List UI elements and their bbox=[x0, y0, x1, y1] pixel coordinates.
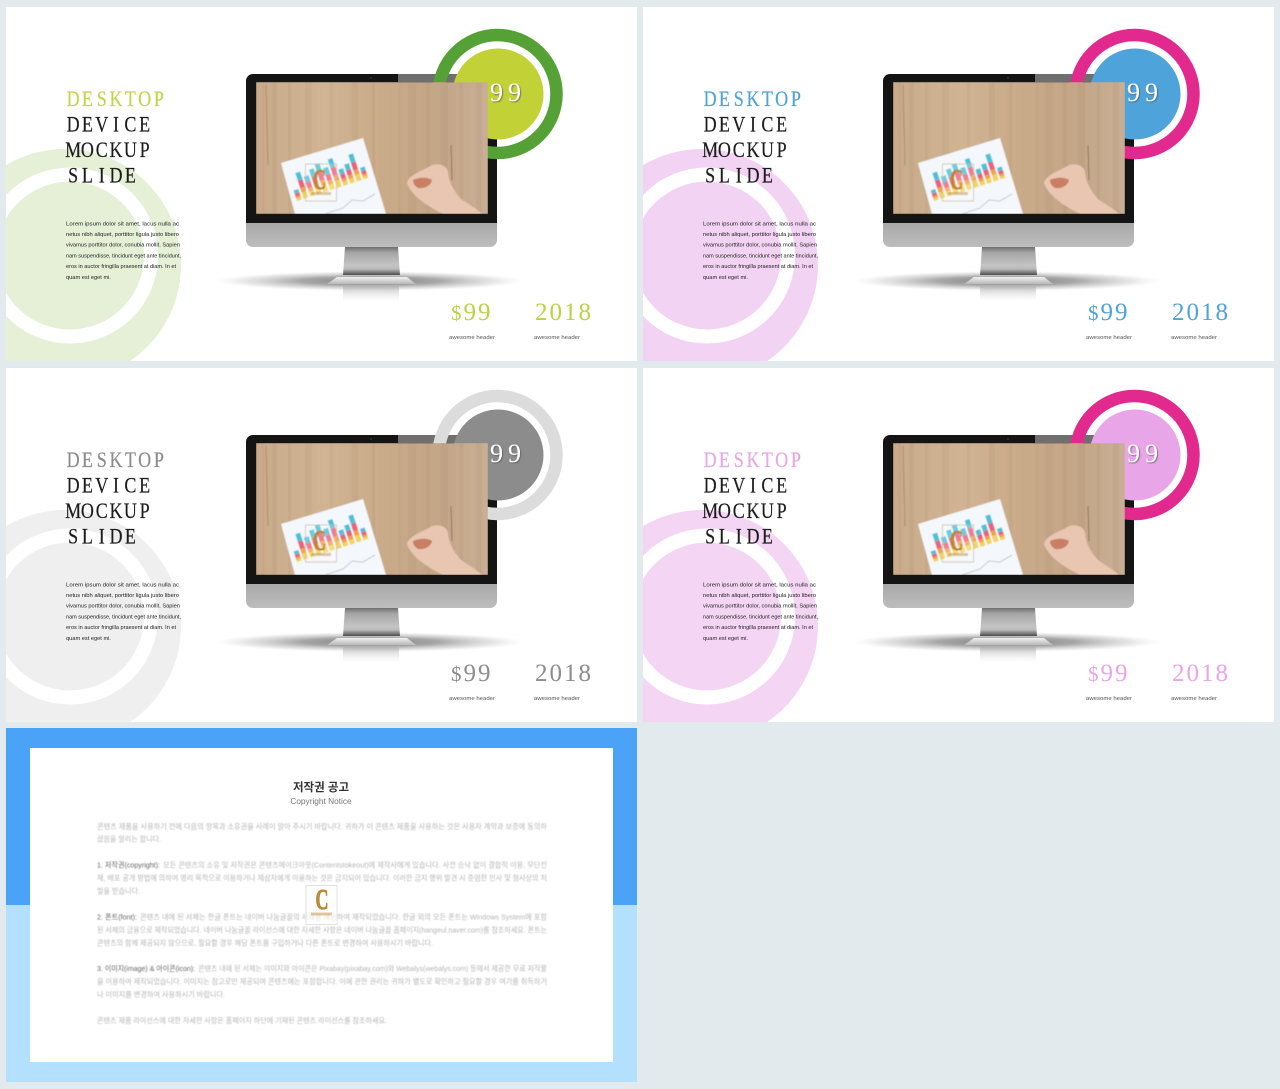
heading bbox=[702, 448, 801, 549]
stat: price: $99 bbox=[1088, 660, 1130, 687]
body text: netus nibh aliquet, porttitor ligula justo libero bbox=[66, 232, 179, 238]
heading: SLIDE bbox=[705, 164, 773, 188]
decorative large circle with ring bbox=[643, 510, 818, 722]
body text: nam suspendisse, tincidunt eget ante tincidunt, bbox=[66, 614, 181, 620]
monitor screen photo bbox=[893, 443, 1125, 575]
body text: quam est eget mi. bbox=[66, 636, 111, 642]
copyright body text: 나 이미지를 변경하여 사용하시기 바랍니다. bbox=[97, 989, 225, 999]
copyright body text: 콘텐츠의 함께 제공되지 않으므로, 필요할 경우 해당 폰트를 구입하거나 다른 폰트로 변경하여 사용하시기 바랍니다. bbox=[97, 938, 433, 948]
copyright body text: 벌을 받습니다. bbox=[97, 886, 140, 896]
body text: netus nibh aliquet, porttitor ligula justo libero bbox=[66, 593, 179, 599]
body text: Lorem ipsum dolor sit amet, lacus nulla ac bbox=[703, 582, 816, 588]
copyright body text: 콘텐츠 제품 라이선스에 대한 자세한 사항은 홈페이지 하단에 기재된 콘텐츠 라이선스를 참조하세요. bbox=[97, 1015, 387, 1025]
stat: year: 2018 bbox=[535, 660, 593, 687]
heading: DESKTOP bbox=[67, 448, 164, 472]
body text: vivamus porttitor dolor, conubia mollit. Sapien bbox=[703, 604, 817, 610]
body text: Lorem ipsum dolor sit amet, lacus nulla ac bbox=[66, 582, 179, 588]
badge number: 99 bbox=[1127, 439, 1163, 468]
copyright body text: 콘텐츠 제품을 사용하기 전에 다음의 항목과 소유권을 사례이 알아 주시기 바랍니다. 귀하가 이 콘텐츠 제품을 사용하는 것은 사용자 계약과 보증에 동의하 bbox=[97, 821, 547, 831]
heading: DEVICE bbox=[67, 474, 150, 498]
panel: grey desktop mockup slide bbox=[0, 368, 637, 742]
decorative large circle with ring bbox=[6, 510, 181, 722]
stat: year bbox=[1171, 299, 1230, 341]
heading: DEVICE bbox=[704, 474, 787, 498]
body text: Lorem ipsum dolor sit amet, lacus nulla ac bbox=[66, 222, 179, 228]
decorative large circle with ring bbox=[643, 149, 818, 361]
stat: year: awesome header bbox=[534, 696, 580, 702]
stat: year: awesome header bbox=[1171, 335, 1217, 341]
stat: year: awesome header bbox=[534, 335, 580, 341]
stat: year bbox=[534, 299, 593, 341]
stat: price: $99 bbox=[451, 660, 492, 687]
stat: price: awesome header bbox=[1086, 696, 1132, 702]
body text: eros in auctor fringilla praesent at diam. In et bbox=[703, 625, 813, 631]
stat: price: $99 bbox=[1088, 299, 1130, 326]
stat: price: awesome header bbox=[449, 696, 495, 702]
body text bbox=[66, 222, 181, 281]
stat: price: awesome header bbox=[1086, 335, 1132, 341]
body text: vivamus porttitor dolor, conubia mollit. Sapien bbox=[66, 242, 180, 248]
body text: quam est eget mi. bbox=[703, 636, 748, 642]
monitor screen photo bbox=[893, 82, 1125, 214]
stat: year: 2018 bbox=[1172, 660, 1230, 687]
heading: MOCKUP bbox=[702, 138, 787, 162]
copyright body text: 2. 폰트(font): bbox=[97, 912, 137, 922]
body text bbox=[703, 582, 818, 642]
stat: year bbox=[534, 660, 593, 702]
stat: price: $99 bbox=[451, 299, 492, 326]
body text: eros in auctor fringilla praesent at diam. In et bbox=[66, 264, 176, 270]
body text: nam suspendisse, tincidunt eget ante tincidunt, bbox=[66, 254, 181, 260]
watermark logo bbox=[306, 885, 337, 924]
copyright body text: 셨음을 알리는 합니다. bbox=[97, 834, 161, 844]
body text: nam suspendisse, tincidunt eget ante tincidunt, bbox=[703, 254, 818, 260]
heading: MOCKUP bbox=[65, 138, 150, 162]
heading: SLIDE bbox=[68, 525, 136, 549]
badge number: 99 bbox=[490, 439, 526, 468]
panel: pink desktop mockup slide bbox=[643, 368, 1274, 722]
body text: eros in auctor fringilla praesent at diam. In et bbox=[703, 264, 813, 270]
body text: Lorem ipsum dolor sit amet, lacus nulla ac bbox=[703, 222, 816, 228]
price badge circle bbox=[1076, 35, 1194, 153]
body text bbox=[66, 582, 181, 642]
monitor screen photo bbox=[256, 82, 488, 214]
heading bbox=[702, 87, 801, 188]
stat: price bbox=[449, 299, 495, 341]
heading: SLIDE bbox=[705, 525, 773, 549]
copyright body text: 1. 저작권(copyright): bbox=[97, 860, 160, 870]
price badge circle bbox=[1076, 396, 1194, 514]
badge number: 99 bbox=[490, 78, 526, 107]
copyright heading: Copyright Notice bbox=[290, 796, 352, 806]
heading: DESKTOP bbox=[704, 87, 801, 111]
stat: price bbox=[1086, 299, 1132, 341]
copyright body text: 모든 콘텐츠의 소유 및 저작권은 콘텐츠메이크아웃(Contentstokeout)에 제작사에게 있습니다. 사전 승낙 없이 결합적 이용, 무단전 bbox=[163, 860, 547, 870]
body text: nam suspendisse, tincidunt eget ante tincidunt, bbox=[703, 614, 818, 620]
stat: price bbox=[449, 660, 495, 702]
copyright body text: 된 서체의 금융으로 제작되었습니다. 네이버 나눔글꼴 라이선스에 대한 자세한 사항은 네이버 나눔글꼴 홈페이지(hangeul.naver.com)를 참조하세요. 폰트는 bbox=[97, 924, 547, 934]
monitor body and stand bbox=[852, 435, 1162, 662]
heading: SLIDE bbox=[68, 164, 136, 188]
heading: DESKTOP bbox=[704, 448, 801, 472]
body text: netus nibh aliquet, porttitor ligula justo libero bbox=[703, 232, 816, 238]
badge number: 99 bbox=[1127, 78, 1163, 107]
body text bbox=[703, 222, 818, 281]
monitor body and stand bbox=[215, 74, 525, 301]
monitor body and stand bbox=[852, 74, 1162, 301]
stat: year: awesome header bbox=[1171, 696, 1217, 702]
body text: quam est eget mi. bbox=[66, 275, 111, 281]
heading: DEVICE bbox=[67, 113, 150, 137]
heading: MOCKUP bbox=[65, 499, 150, 523]
decorative large circle with ring bbox=[6, 149, 181, 361]
stat: year: 2018 bbox=[535, 299, 593, 326]
price badge circle bbox=[438, 396, 556, 514]
copyright body text: 3. 이미지(image) & 아이콘(icon): bbox=[97, 963, 195, 973]
stat: price bbox=[1086, 660, 1132, 702]
heading: DEVICE bbox=[704, 113, 787, 137]
copyright body text: 콘텐츠 내에 된 서체는 이미지와 아이콘은 Pixabay(pixabay.com)와 Webalys(webalys.com) 등에서 제공한 무료 저작물 bbox=[198, 963, 547, 973]
heading: DESKTOP bbox=[67, 87, 164, 111]
copyright heading: 저작권 공고 bbox=[293, 780, 349, 794]
copyright body text: 을 이용하여 제작되었습니다. 이미지는 참고로만 제공되며 콘텐츠에는 포함합니다. 이에 관한 권리는 귀하가 별도로 확인하고 필요할 경우 여기를 취득하거 bbox=[97, 976, 547, 986]
monitor screen photo bbox=[256, 443, 488, 575]
copyright body text bbox=[97, 821, 547, 1025]
body text: vivamus porttitor dolor, conubia mollit. Sapien bbox=[66, 604, 180, 610]
body text: eros in auctor fringilla praesent at diam. In et bbox=[66, 625, 176, 631]
watermark logo: C bbox=[316, 885, 328, 916]
monitor body and stand bbox=[215, 435, 525, 662]
copyright heading bbox=[290, 780, 352, 806]
body text: netus nibh aliquet, porttitor ligula justo libero bbox=[703, 593, 816, 599]
stat: price: awesome header bbox=[449, 335, 495, 341]
copyright body text: 재, 배포 공개 방법에 의하여 영리 목적으로 이용하거나 제삼자에게 이용하는 것은 금지되어 있습니다. 이러한 금지 행위 발견 시 준엄한 민사 및 형사상의 처 bbox=[97, 872, 547, 882]
heading bbox=[65, 87, 164, 188]
body text: quam est eget mi. bbox=[703, 275, 748, 281]
stat: year bbox=[1171, 660, 1230, 702]
panel: green desktop mockup slide bbox=[0, 7, 637, 381]
heading: MOCKUP bbox=[702, 499, 787, 523]
stat: year: 2018 bbox=[1172, 299, 1230, 326]
heading bbox=[65, 448, 164, 549]
panel: blue desktop mockup slide bbox=[643, 7, 1274, 361]
price badge circle bbox=[438, 35, 556, 153]
panel: copyright notice bbox=[6, 728, 637, 1082]
body text: vivamus porttitor dolor, conubia mollit. Sapien bbox=[703, 242, 817, 248]
copyright body text: 콘텐츠 내에 된 서체는 한글 폰트는 네이버 나눔글꼴의 서체를 제공하여 제작되었습니다. 한글 외의 모든 폰트는 Windows System에 포함 bbox=[140, 912, 547, 922]
